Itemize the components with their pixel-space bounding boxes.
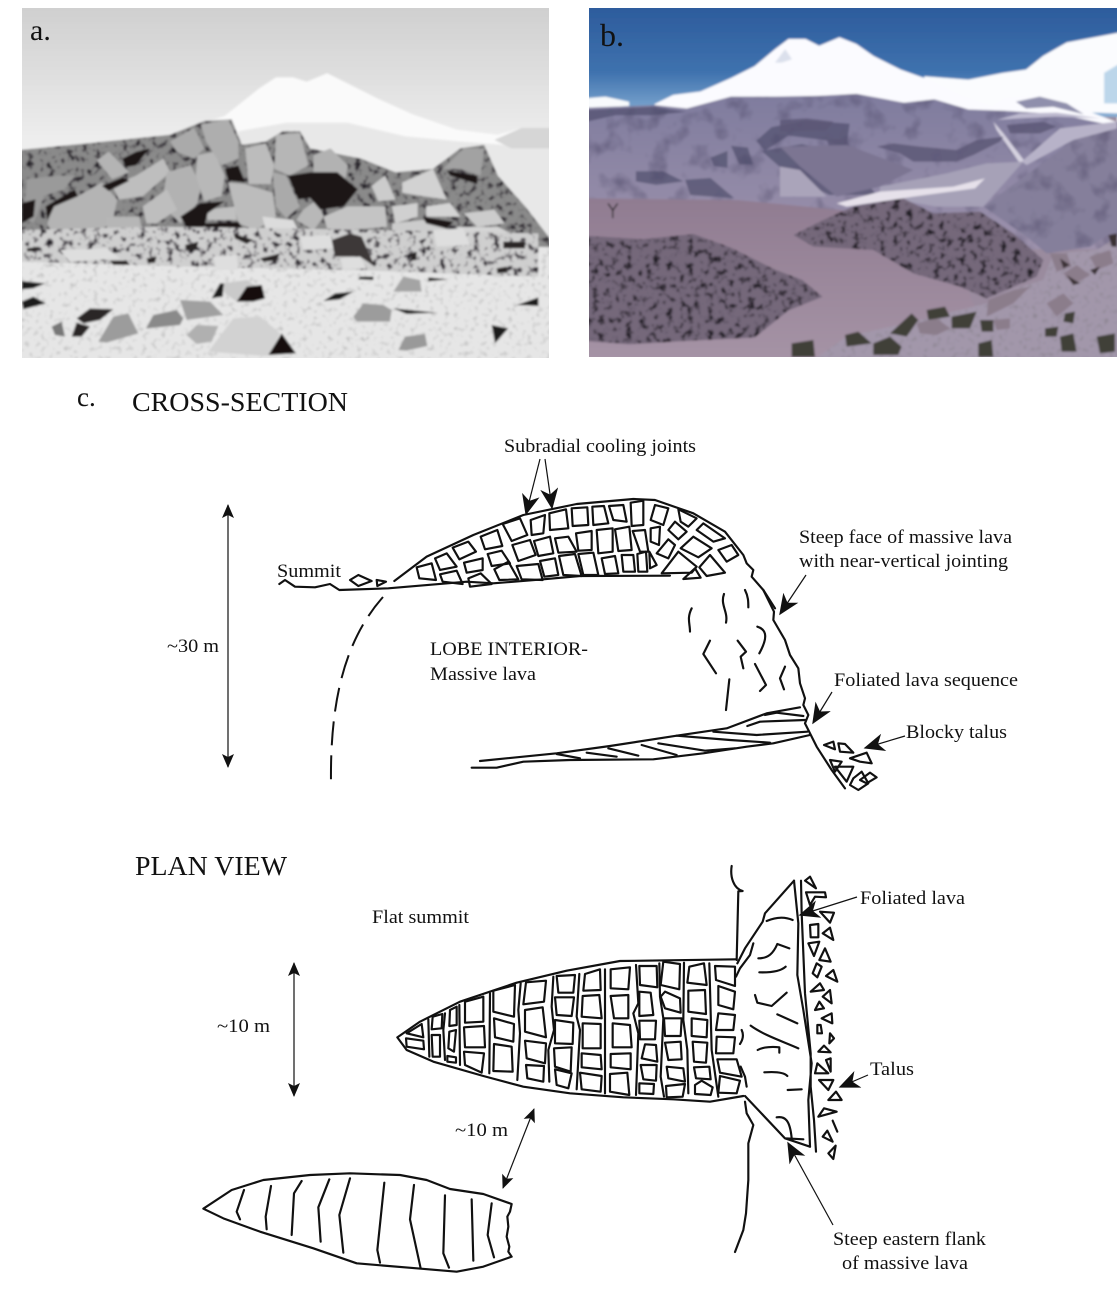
arrow: talus	[840, 1075, 868, 1087]
label: steep eastern flank: Steep eastern flank	[833, 1229, 987, 1250]
eastern flank, foliated band and talus in plan	[731, 866, 842, 1252]
arrow: steep eastern flank	[788, 1143, 833, 1225]
arrow: blocky talus	[865, 736, 905, 748]
label: lobe interior: LOBE INTERIOR-	[430, 639, 588, 660]
arrow: foliated lava sequence	[813, 692, 832, 723]
label: talus: Talus	[870, 1059, 914, 1080]
jointed summit crust with cooling joint blocks	[279, 499, 775, 608]
lower lobe in plan	[203, 1173, 512, 1272]
heading: cross-section: CROSS-SECTION	[132, 387, 348, 417]
heading: plan view: PLAN VIEW	[135, 851, 288, 881]
arrows: subradial cooling joints	[526, 459, 552, 514]
separation arrow: about 10 m	[503, 1109, 534, 1188]
jointed upper lobe in plan	[397, 959, 743, 1102]
diagram: cross-section of lava lobe	[167, 436, 1018, 790]
label: about 10 m separation: ~10 m	[455, 1120, 508, 1141]
label: lobe interior: Massive lava	[430, 664, 537, 685]
height arrow: about 10 m	[293, 963, 295, 1096]
label: flat summit: Flat summit	[372, 907, 470, 928]
label: steep face of massive lava: with near-vertical jointing	[799, 551, 1009, 572]
label: steep face of massive lava: Steep face of massive lava	[799, 527, 1013, 548]
dashed buried lobe margin	[331, 597, 383, 783]
height arrow: about 30 m	[227, 505, 229, 767]
steep face, foliated lava sequence and talus	[472, 590, 877, 790]
label: about 30 m: ~30 m	[167, 636, 219, 657]
arrow: steep face	[780, 575, 806, 614]
panel label c: c.	[77, 382, 96, 412]
photo b: colour view of lava lobes and snow-capped volcano	[585, 5, 1117, 365]
label: subradial cooling joints: Subradial cooling joints	[504, 436, 696, 457]
label: summit: Summit	[277, 561, 342, 582]
photo a: black and white lava lobe with snow-capped volcano	[20, 5, 566, 367]
label: about 10 m height: ~10 m	[217, 1016, 270, 1037]
panel label b: b.	[600, 17, 624, 53]
label: steep eastern flank: of massive lava	[842, 1253, 969, 1274]
arrow: foliated lava	[800, 897, 857, 915]
label: foliated lava: Foliated lava	[860, 888, 966, 909]
panel label a: a.	[30, 14, 51, 47]
diagram: plan view of lava lobes	[203, 866, 987, 1274]
label: foliated lava sequence: Foliated lava sequence	[834, 670, 1018, 691]
label: blocky talus: Blocky talus	[906, 722, 1007, 743]
